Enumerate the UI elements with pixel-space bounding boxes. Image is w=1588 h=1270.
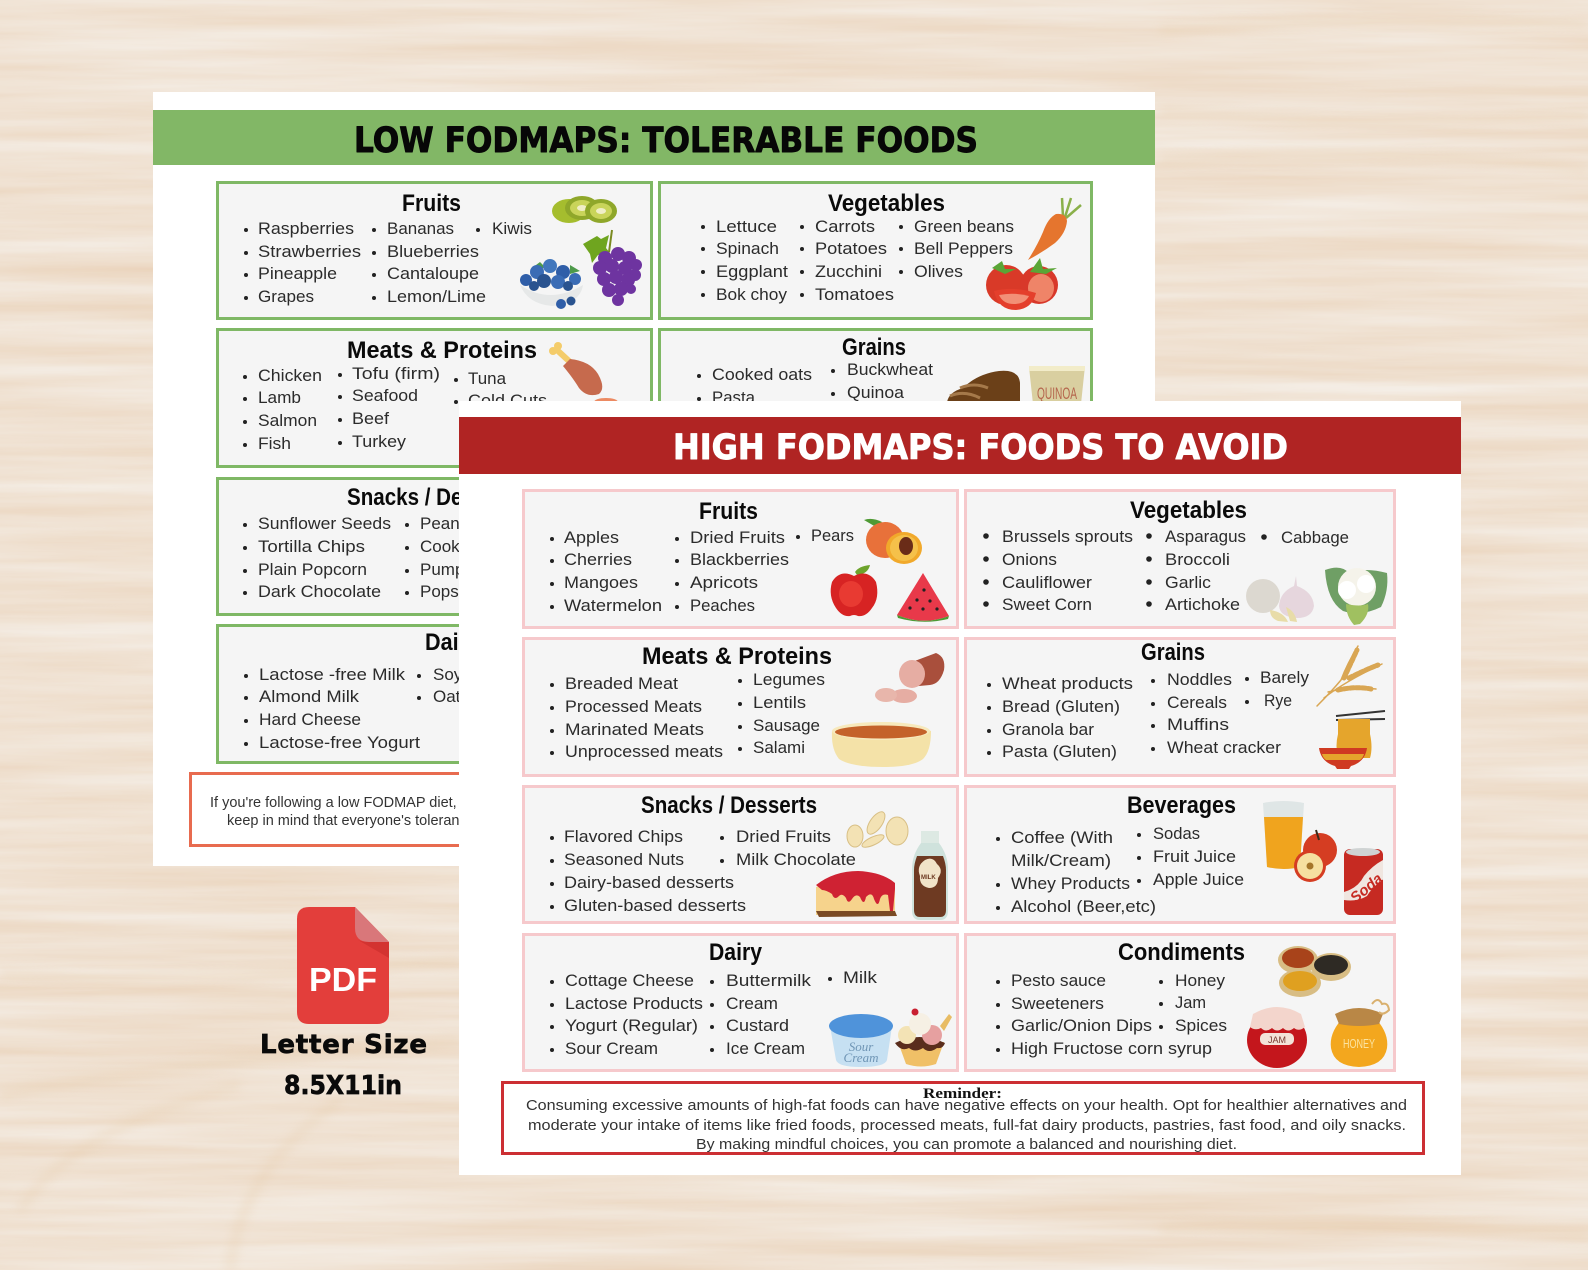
list: high grains: Granola bar xyxy=(1002,720,1094,739)
list: high vegetables: Artichoke xyxy=(1165,595,1240,614)
panel: low meats and proteins xyxy=(218,330,652,466)
list: high grains: Muffins xyxy=(1167,715,1229,734)
list: high fruits: Pears xyxy=(811,526,854,545)
panel: high snacks and desserts xyxy=(524,786,958,922)
icon: juice glass xyxy=(1263,801,1304,869)
list: high meats and proteins: Lentils xyxy=(753,693,806,712)
list: low fruits: Cantaloupe xyxy=(387,264,479,283)
list: low snacks and desserts: Cookies xyxy=(420,537,481,556)
list: high grains: Rye xyxy=(1264,691,1292,710)
list: low fruits: Grapes xyxy=(258,287,314,306)
list: high grains: Pasta (Gluten) xyxy=(1002,742,1117,761)
list: low dairy xyxy=(244,665,498,752)
list: low vegetables: Tomatoes xyxy=(815,285,894,304)
list: high snacks and desserts: Milk Chocolate xyxy=(736,850,856,869)
list: low meats and proteins: Chicken xyxy=(258,366,322,385)
list: high dairy: Buttermilk xyxy=(726,971,812,990)
list: low grains: Buckwheat xyxy=(847,360,933,379)
list: low snacks and desserts: Plain Popcorn xyxy=(258,560,367,579)
icon: peach xyxy=(864,519,922,564)
icon: cauliflower xyxy=(1325,568,1387,625)
icon: sour cream tub xyxy=(829,1014,893,1067)
icon: PDF file xyxy=(297,907,389,1024)
heading: low meats and proteins: Meats & Proteins xyxy=(347,337,537,364)
list: high meats and proteins: Marinated Meats xyxy=(565,720,704,739)
list: low snacks and desserts: Pumpkin xyxy=(420,560,486,579)
list: high vegetables: Onions xyxy=(1002,550,1057,569)
list: high vegetables: Brussels sprouts xyxy=(1002,527,1133,546)
list: low meats and proteins: Fish xyxy=(258,434,291,453)
icon: garlic xyxy=(1246,576,1314,622)
callout: high reminder: By making mindful choices, you can promote a balanced and nourishing diet. xyxy=(696,1137,1237,1153)
list: high meats and proteins: Legumes xyxy=(753,670,825,689)
icon: blueberry bowl xyxy=(520,259,583,309)
list: low snacks and desserts: Sunflower Seeds xyxy=(258,514,391,533)
list: high meats and proteins xyxy=(550,670,825,761)
list: high beverages: Alcohol (Beer,etc) xyxy=(1011,897,1156,916)
icon: red apple xyxy=(831,565,877,616)
icon: carrot xyxy=(1028,198,1081,260)
list: low meats and proteins: Cold Cuts xyxy=(468,391,547,410)
icon: ham roll and slices xyxy=(875,653,944,703)
list: high fruits: Dried Fruits xyxy=(690,528,785,547)
list: low meats and proteins xyxy=(243,364,547,453)
list: low meats and proteins: Lamb xyxy=(258,388,301,407)
list: low dairy: Lactose -free Milk xyxy=(259,665,406,684)
callout: high reminder: Consuming excessive amounts of high-fat foods can have negative effects on your health. Opt for healthier alternatives and xyxy=(526,1098,1407,1114)
list: high snacks and desserts: Seasoned Nuts xyxy=(564,850,684,869)
list: low meats and proteins: Tuna xyxy=(468,369,507,388)
list: low snacks and desserts: Popsicles xyxy=(420,582,493,601)
icon: noodle bowl xyxy=(1319,711,1385,769)
icon: banana chips xyxy=(847,809,908,850)
list: high fruits: Apricots xyxy=(690,573,758,592)
list: high snacks and desserts: Gluten-based desserts xyxy=(564,896,746,915)
callout: high reminder xyxy=(502,1082,1424,1154)
list: high dairy: Yogurt (Regular) xyxy=(565,1016,698,1035)
list: high meats and proteins: Salami xyxy=(753,738,805,757)
icon: apples xyxy=(1294,830,1337,882)
panel: high dairy xyxy=(524,934,958,1070)
list: high vegetables xyxy=(983,527,1349,614)
list: high vegetables: Broccoli xyxy=(1165,550,1230,569)
list: low grains xyxy=(697,360,933,407)
list: high beverages: Whey Products xyxy=(1011,874,1130,893)
panel: high vegetables: Vegetables xyxy=(1130,497,1247,524)
icon: chicken leg xyxy=(549,342,618,406)
list: low fruits: Kiwis xyxy=(492,219,532,238)
list: low vegetables: Zucchini xyxy=(815,262,882,281)
icon: soda can: Soda xyxy=(1347,870,1386,907)
list: low meats and proteins: Beef xyxy=(352,409,389,428)
list: high condiments: Pesto sauce xyxy=(1011,971,1106,990)
list: high fruits: Blackberries xyxy=(690,550,789,569)
list: low dairy: Lactose-free Yogurt xyxy=(259,733,420,752)
icon: wheat stalks xyxy=(1317,646,1382,706)
icon: spice bowls xyxy=(1278,946,1351,997)
list: high condiments: Honey xyxy=(1175,971,1226,990)
list: high dairy: Lactose Products xyxy=(565,994,703,1013)
panel: low vegetables xyxy=(660,182,1092,318)
list: high beverages: Milk/Cream) xyxy=(1011,851,1111,870)
panel: low grains xyxy=(660,330,1092,466)
icon: quinoa bag xyxy=(1029,366,1085,404)
list: high snacks and desserts xyxy=(550,827,856,915)
list: low meats and proteins: Seafood xyxy=(352,386,418,405)
list: high fruits: Watermelon xyxy=(564,596,662,615)
list: low dairy: Hard Cheese xyxy=(259,710,361,729)
icon: kiwi slices xyxy=(552,196,617,223)
list: high meats and proteins: Sausage xyxy=(753,716,820,735)
list: low vegetables xyxy=(701,217,1014,304)
label: letter size: Letter Size xyxy=(260,1030,427,1060)
panel: high fruits: Fruits xyxy=(699,498,758,525)
list: high grains: Noddles xyxy=(1167,670,1232,689)
list: low vegetables: Green beans xyxy=(914,217,1014,236)
icon: grapes xyxy=(583,230,642,306)
high FODMAP title banner xyxy=(459,417,1461,474)
list: low snacks and desserts xyxy=(243,514,493,601)
list: low vegetables: Carrots xyxy=(815,217,875,236)
icon: tomatoes xyxy=(986,258,1058,310)
list: low fruits: Bananas xyxy=(387,219,454,238)
list: high condiments: Sweeteners xyxy=(1011,994,1104,1013)
high FODMAP page xyxy=(459,401,1461,1175)
panel: low dairy xyxy=(218,626,652,762)
list: high grains: Wheat cracker xyxy=(1167,738,1281,757)
list: low vegetables: Olives xyxy=(914,262,963,281)
callout: high reminder: Reminder: xyxy=(923,1086,1002,1102)
list: low dairy: Soy Milk xyxy=(433,665,498,684)
list: high fruits: Mangoes xyxy=(564,573,638,592)
list: low vegetables: Eggplant xyxy=(716,262,788,281)
list: high beverages: Apple Juice xyxy=(1153,870,1244,889)
panel: high condiments xyxy=(966,934,1394,1070)
list: high dairy: Cottage Cheese xyxy=(565,971,694,990)
list: high snacks and desserts: Dairy-based desserts xyxy=(564,873,734,892)
list: low snacks and desserts: Peanuts xyxy=(420,514,482,533)
list: high dairy: Cream xyxy=(726,994,778,1013)
icon: chocolate milk bottle: MILK xyxy=(921,875,936,881)
icon: honey jar: HONEY xyxy=(1343,1036,1375,1051)
list: high grains: Wheat products xyxy=(1002,674,1133,693)
list: high beverages: Coffee (With xyxy=(1011,828,1113,847)
heading: low snacks and desserts: Snacks / Desserts xyxy=(347,484,523,511)
panel: high fruits xyxy=(524,490,958,628)
panel: low snacks and desserts xyxy=(218,478,652,614)
heading: low grains: Grains xyxy=(842,334,906,361)
high FODMAP title banner: HIGH FODMAPS: FOODS TO AVOID xyxy=(673,428,1288,468)
list: low snacks and desserts: Dark Chocolate xyxy=(258,582,381,601)
list: low meats and proteins: Turkey xyxy=(352,432,407,451)
list: low grains: Quinoa xyxy=(847,383,905,402)
icon: PDF file: PDF xyxy=(309,961,377,998)
list: high condiments: Garlic/Onion Dips xyxy=(1011,1016,1152,1035)
list: high snacks and desserts: Dried Fruits xyxy=(736,827,831,846)
list: low fruits: Pineapple xyxy=(258,264,337,283)
icon: ice cream sundae xyxy=(895,1008,952,1066)
panel: low fruits xyxy=(218,182,652,318)
panel: high beverages xyxy=(966,786,1394,922)
list: high beverages xyxy=(996,824,1244,916)
list: high condiments: Spices xyxy=(1175,1016,1227,1035)
panel: high meats and proteins: Meats & Proteins xyxy=(642,643,832,670)
label: page dimensions: 8.5X11in xyxy=(284,1071,402,1101)
callout: low reminder: keep in mind that everyone's tolerance xyxy=(227,813,475,829)
icon: sour cream tub: Sour xyxy=(849,1039,874,1054)
list: high meats and proteins: Processed Meats xyxy=(565,697,702,716)
list: low dairy: Oat Milk xyxy=(433,687,496,706)
list: high vegetables: Cabbage xyxy=(1281,528,1349,547)
icon: honey jar xyxy=(1331,1000,1389,1067)
list: low fruits: Strawberries xyxy=(258,242,361,261)
list: low fruits: Lemon/Lime xyxy=(387,287,486,306)
list: high vegetables: Sweet Corn xyxy=(1002,595,1092,614)
list: low vegetables: Spinach xyxy=(716,239,779,258)
icon: watermelon slice xyxy=(897,573,949,622)
list: high condiments: Jam xyxy=(1175,993,1206,1012)
list: high grains: Barely xyxy=(1260,668,1310,687)
list: low fruits: Raspberries xyxy=(258,219,354,238)
panel: high meats and proteins xyxy=(524,638,958,776)
list: high dairy: Ice Cream xyxy=(726,1039,805,1058)
icon: sour cream tub: Cream xyxy=(844,1050,878,1065)
panel: low fruits: Fruits xyxy=(402,190,461,217)
list: low grains: Cooked oats xyxy=(712,365,812,384)
list: high vegetables: Asparagus xyxy=(1165,527,1246,546)
icon: soda can xyxy=(1344,848,1386,915)
heading: low dairy: Dairy xyxy=(425,629,480,656)
low FODMAP title banner: LOW FODMAPS: TOLERABLE FOODS xyxy=(354,121,978,161)
list: low vegetables: Bok choy xyxy=(716,285,787,304)
icon: jam jar: JAM xyxy=(1268,1035,1286,1045)
callout: high reminder: moderate your intake of items like fried foods, processed meats, full-fat dairy products, pastries, fast food, and oily snacks. xyxy=(528,1118,1406,1134)
list: low meats and proteins: Tofu (firm) xyxy=(352,364,440,383)
list: high fruits: Cherries xyxy=(564,550,632,569)
list: low vegetables: Lettuce xyxy=(716,217,777,236)
list: high vegetables: Cauliflower xyxy=(1002,573,1092,592)
icon: quinoa bag: QUINOA xyxy=(1037,384,1077,403)
icon: chocolate milk bottle xyxy=(912,831,948,920)
list: high dairy xyxy=(550,968,878,1058)
list: high grains xyxy=(987,668,1310,761)
icon: soup bowl xyxy=(832,722,931,767)
low FODMAP title banner xyxy=(153,110,1155,165)
panel: high grains: Grains xyxy=(1141,639,1205,666)
callout: low reminder: If you're following a low FODMAP diet, xyxy=(210,795,457,811)
list: high beverages: Sodas xyxy=(1153,824,1200,843)
list: high meats and proteins: Breaded Meat xyxy=(565,674,678,693)
list: high fruits xyxy=(550,526,854,615)
panel: high grains xyxy=(966,638,1394,776)
low FODMAP page xyxy=(153,92,1155,866)
list: high fruits: Peaches xyxy=(690,596,755,615)
list: high meats and proteins: Unprocessed meats xyxy=(565,742,723,761)
list: high condiments: High Fructose corn syrup xyxy=(1011,1039,1212,1058)
list: high beverages: Fruit Juice xyxy=(1153,847,1236,866)
list: low dairy: Almond Milk xyxy=(259,687,360,706)
icon: jam jar xyxy=(1247,1007,1307,1068)
list: high snacks and desserts: Flavored Chips xyxy=(564,827,683,846)
panel: high vegetables xyxy=(966,490,1394,628)
list: high dairy: Sour Cream xyxy=(565,1039,658,1058)
list: high dairy: Milk xyxy=(843,968,878,987)
icon: cheesecake xyxy=(816,871,897,917)
panel: high beverages: Beverages xyxy=(1127,792,1236,819)
panel: high snacks and desserts: Snacks / Desserts xyxy=(641,792,817,819)
list: low meats and proteins: Salmon xyxy=(258,411,317,430)
list: low grains: Pasta xyxy=(712,388,756,407)
list: high dairy: Custard xyxy=(726,1016,789,1035)
list: low fruits: Blueberries xyxy=(387,242,479,261)
list: high vegetables: Garlic xyxy=(1165,573,1212,592)
heading: low vegetables: Vegetables xyxy=(828,190,945,217)
list: high condiments xyxy=(996,971,1227,1058)
panel: high dairy: Dairy xyxy=(709,939,763,966)
list: low vegetables: Bell Peppers xyxy=(914,239,1013,258)
list: low vegetables: Potatoes xyxy=(815,239,887,258)
callout: low reminder xyxy=(190,774,790,846)
icon: brown bread xyxy=(947,371,1020,403)
panel: high condiments: Condiments xyxy=(1118,939,1245,966)
list: low snacks and desserts: Tortilla Chips xyxy=(258,537,365,556)
list: high grains: Cereals xyxy=(1167,693,1227,712)
list: high fruits: Apples xyxy=(564,528,619,547)
list: high grains: Bread (Gluten) xyxy=(1002,697,1120,716)
list: low fruits xyxy=(244,219,532,306)
